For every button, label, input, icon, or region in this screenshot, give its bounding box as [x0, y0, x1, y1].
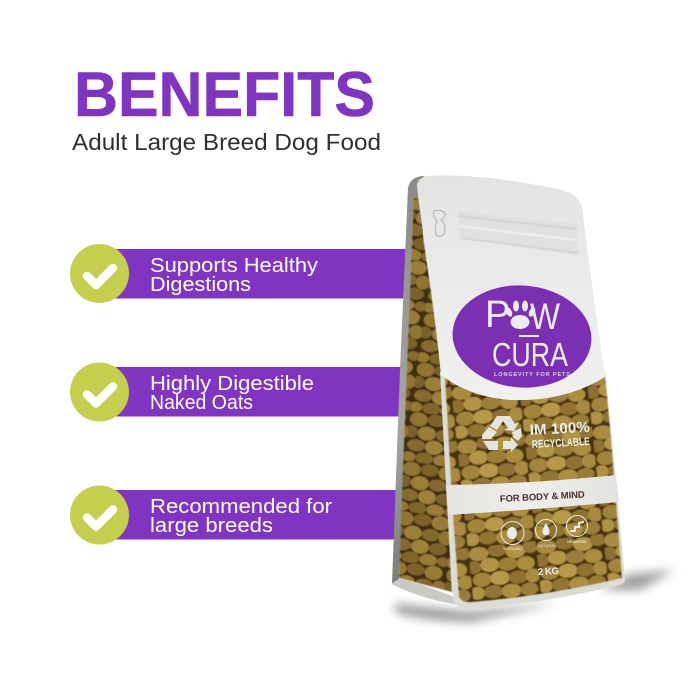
front panel lower: [440, 372, 625, 609]
front panel white top: [417, 175, 605, 400]
feature icon 1: [501, 522, 524, 544]
feature captions: [503, 540, 587, 551]
logo wordmark PAW: P: [485, 294, 510, 336]
front panel kibble: [445, 376, 622, 602]
feature icon 2: [536, 520, 556, 540]
benefit text 1 line 1: Supports Healthy: [150, 254, 319, 277]
caption 3: HYPOALLERGENIC: [567, 540, 587, 544]
feature icon 3: [566, 516, 588, 536]
check badge 1: [70, 244, 129, 303]
zipper seal: [433, 210, 578, 255]
bag weight: 2 KG: [538, 566, 559, 578]
benefit bar 1: [115, 249, 410, 298]
benefit text 2 line 2: Naked Oats: [150, 391, 253, 414]
recycling line 1: IM 100%: [529, 419, 590, 439]
bag shadow: [395, 570, 675, 622]
benefit 3: [70, 486, 410, 544]
side gusset kibble: [399, 195, 452, 592]
gusset grey edge: [392, 176, 430, 584]
white band: [446, 475, 619, 515]
recycling line 2: RECYCLABLE: [532, 436, 590, 451]
caption 1: SUSTAINABLE: [503, 547, 524, 551]
logo oval: [449, 281, 595, 392]
benefit text 2 line 1: Highly Digestible: [150, 372, 314, 395]
logo tagline: LONGEVITY FOR PETS: [494, 372, 570, 378]
benefit 2: [70, 362, 410, 422]
recycling text: [529, 419, 590, 451]
band text: FOR BODY & MIND: [500, 490, 585, 505]
check badge 2: [70, 362, 129, 422]
feature icons: [501, 516, 588, 544]
benefit text 3 line 1: Recommended for: [150, 495, 332, 518]
check badge 3: [70, 486, 129, 544]
logo divider: [519, 335, 539, 337]
title: BENEFITS: [74, 60, 375, 130]
benefit 1: [70, 244, 410, 303]
benefit text 1 line 2: Digestions: [150, 273, 251, 296]
gusset bottom fold: [391, 578, 456, 604]
benefit bar 3: [115, 490, 410, 540]
paw icon: [504, 300, 537, 329]
logo wordmark CURA: CURA: [492, 336, 568, 373]
benefit bar 2: [115, 367, 410, 416]
benefit text 3 line 2: large breeds: [150, 514, 273, 537]
logo wordmark W: W: [530, 296, 560, 337]
subtitle: Adult Large Breed Dog Food: [72, 129, 381, 155]
recycle icon: [482, 416, 522, 452]
caption 2: NATURAL: [538, 544, 556, 548]
product bag: [391, 175, 675, 622]
